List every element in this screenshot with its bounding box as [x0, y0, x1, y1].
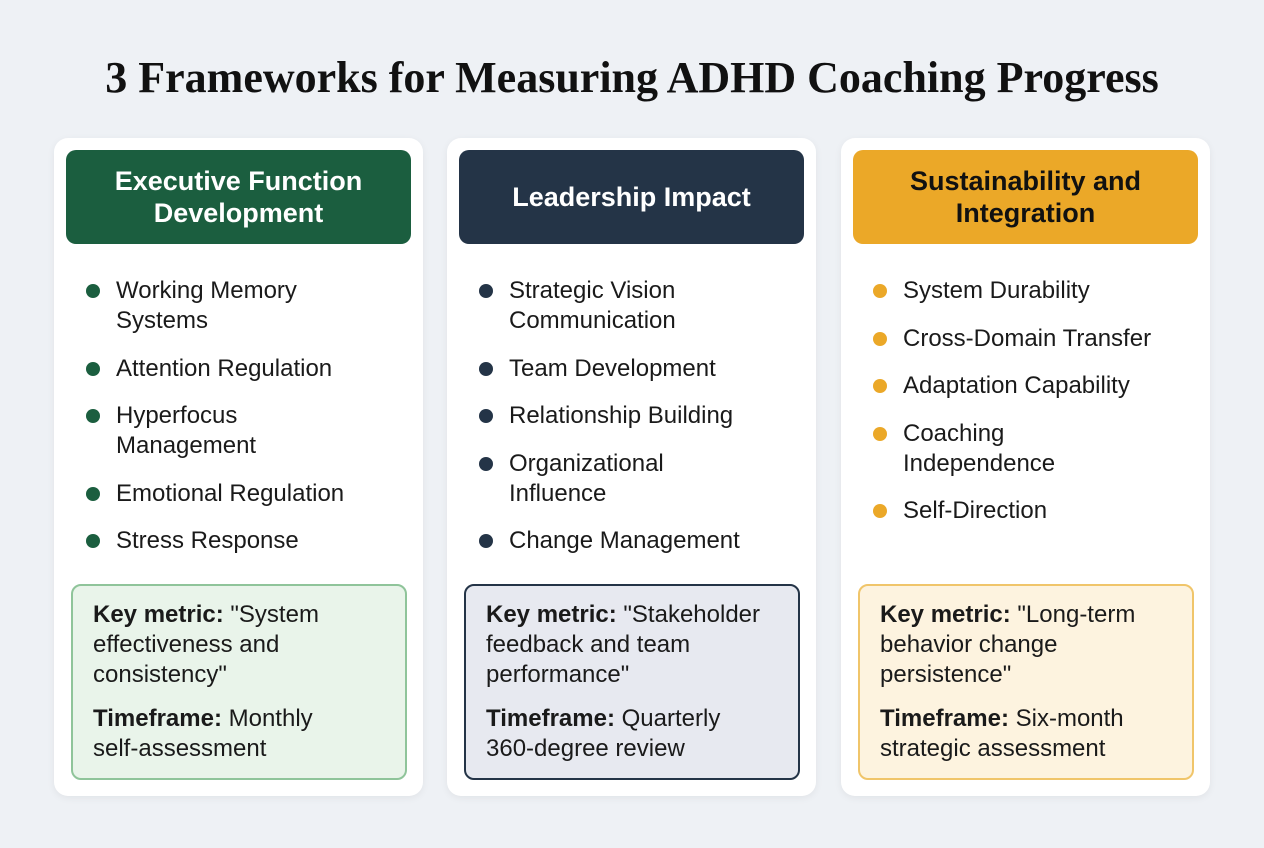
list: leadership items: Organizational [509, 450, 664, 476]
title: 3 Frameworks for Measuring ADHD Coaching Progress [105, 53, 1159, 102]
callout: key metric yellow: Timeframe: Six-month [880, 705, 1124, 732]
list: leadership items: Change Management [509, 527, 740, 554]
list: sustainability items [873, 277, 1151, 524]
callout: key metric green: Timeframe: Monthly [93, 705, 313, 732]
callout: key metric yellow [858, 584, 1194, 780]
list: executive function items [86, 277, 344, 554]
callout: key metric green: Key metric: "System [93, 601, 319, 628]
header: leadership impact [459, 150, 804, 244]
callout: key metric navy [464, 584, 800, 780]
header: executive function [66, 150, 411, 244]
header: executive function: Executive Function [115, 166, 362, 196]
callout: key metric yellow: strategic assessment [880, 735, 1105, 762]
list: leadership items: Strategic Vision [509, 277, 675, 304]
list: leadership items: Team Development [509, 354, 716, 382]
callout: key metric green: self-assessment [93, 735, 266, 762]
callout: key metric navy: 360-degree review [486, 735, 685, 762]
callout: key metric yellow: Key metric: "Long-term [880, 601, 1135, 628]
panel: executive function [54, 138, 423, 796]
callout: key metric yellow: behavior change [880, 631, 1057, 658]
callout: key metric navy: feedback and team [486, 631, 690, 658]
list: leadership items: Influence [509, 480, 606, 506]
list: executive function items: Stress Response [116, 527, 299, 554]
callout: key metric green: consistency" [93, 661, 227, 688]
list: executive function items: Systems [116, 307, 208, 334]
callout: key metric navy: Timeframe: Quarterly [486, 705, 720, 732]
callout: key metric green [71, 584, 407, 780]
list: sustainability items: Independence [903, 450, 1055, 476]
list: sustainability items: Cross-Domain Transfer [903, 324, 1151, 352]
list: sustainability items: Adaptation Capability [903, 372, 1130, 399]
callout: key metric green: effectiveness and [93, 631, 279, 658]
callout: key metric navy: Key metric: "Stakeholder [486, 601, 760, 628]
header: sustainability [853, 150, 1198, 244]
list: sustainability items: System Durability [903, 277, 1090, 304]
header: executive function: Development [154, 198, 323, 228]
panel: leadership impact [447, 138, 816, 796]
list: executive function items: Working Memory [116, 277, 297, 304]
callout: key metric yellow: persistence" [880, 661, 1011, 688]
list: leadership items [479, 277, 740, 554]
header: sustainability: Sustainability and [910, 166, 1141, 196]
callout: key metric navy: performance" [486, 661, 629, 688]
list: executive function items: Management [116, 432, 256, 459]
panel: sustainability [841, 138, 1210, 796]
list: leadership items: Relationship Building [509, 402, 733, 429]
header: sustainability: Integration [956, 198, 1095, 228]
list: leadership items: Communication [509, 307, 676, 334]
list: sustainability items: Self-Direction [903, 497, 1047, 524]
list: executive function items: Hyperfocus [116, 402, 237, 429]
list: sustainability items: Coaching [903, 420, 1004, 446]
list: executive function items: Emotional Regulation [116, 480, 344, 506]
list: executive function items: Attention Regulation [116, 354, 332, 382]
header: leadership impact: Leadership Impact [512, 182, 751, 212]
